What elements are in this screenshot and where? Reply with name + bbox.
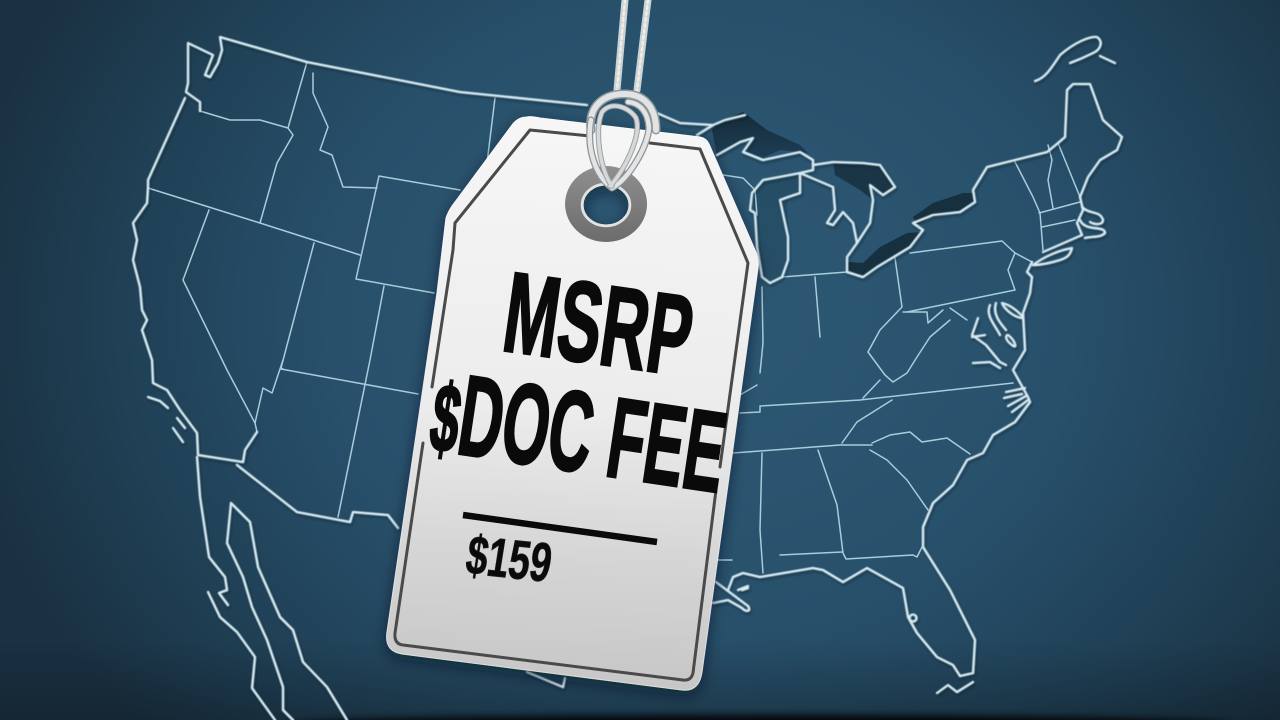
lakes: dark shaded great lakes	[712, 112, 975, 283]
map: continental United States	[133, 37, 1122, 720]
bottom vignette	[0, 640, 1280, 720]
heading: $DOC FEE: $DOC FEE	[423, 348, 734, 517]
coast and international border outlines	[133, 37, 1122, 720]
tag body with punched hole	[387, 117, 758, 690]
tag inner border	[395, 130, 748, 680]
heading: MSRP: MSRP	[497, 249, 700, 401]
divider rule	[463, 515, 657, 542]
string: two cords and knot	[590, 0, 656, 188]
price tag	[387, 0, 758, 690]
price: $159: $159	[462, 524, 556, 594]
state borders	[148, 62, 1080, 573]
eyelet	[565, 166, 647, 242]
bottom dark band	[290, 715, 1230, 720]
